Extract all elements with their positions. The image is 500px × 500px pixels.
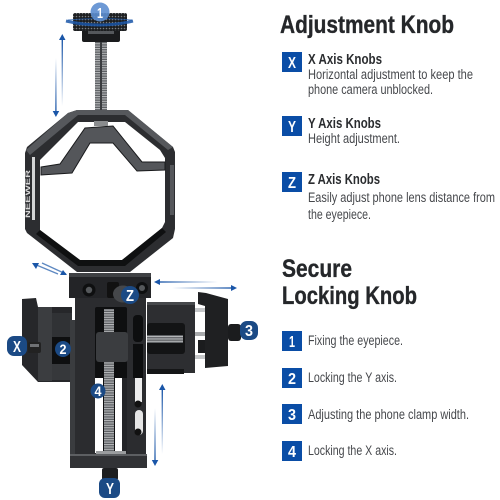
item: Z axis knobs: the eyepiece. xyxy=(308,207,371,222)
item: X axis knobs: phone camera unblocked. xyxy=(308,82,433,97)
item: 2 locking the Y axis xyxy=(282,368,397,388)
badge: 2: 2 xyxy=(60,341,67,357)
item: 2 locking the Y axis: Locking the Y axis. xyxy=(308,370,397,385)
item: 4 locking the X axis: 4 xyxy=(288,444,296,461)
badge: X: X xyxy=(13,339,21,356)
screws on top block xyxy=(82,282,148,302)
item: 1 fixing the eyepiece xyxy=(282,331,403,351)
arrow: vertical ring travel xyxy=(53,34,66,117)
item: 2 locking the Y axis: 2 xyxy=(288,371,296,388)
left clamp xyxy=(22,298,72,382)
badge: 1: 1 xyxy=(97,5,103,22)
badge: 3: 3 xyxy=(245,323,253,340)
bottom foot and Y knob xyxy=(70,451,147,480)
badge: 2 xyxy=(55,341,71,357)
item: 4 locking the X axis xyxy=(282,441,397,461)
heading: Secure Locking Knob: Secure xyxy=(282,255,352,283)
item: Y axis knobs: Height adjustment. xyxy=(308,131,400,146)
heading: Secure Locking Knob: Locking Knob xyxy=(282,282,417,310)
item: Z axis knobs: Z Axis Knobs xyxy=(308,171,380,188)
item: X axis knobs: X xyxy=(288,55,296,72)
item: Z axis knobs xyxy=(282,171,495,222)
badge: 4 xyxy=(90,383,106,399)
item: 3 adjusting the phone clamp width: 3 xyxy=(288,407,296,424)
item: X axis knobs: X Axis Knobs xyxy=(308,51,382,68)
heading: Secure Locking Knob xyxy=(282,255,417,310)
arrow: top knob rotation xyxy=(66,18,133,25)
item: Y axis knobs xyxy=(282,115,400,146)
item: 1 fixing the eyepiece: Fixing the eyepiece. xyxy=(308,333,403,348)
ring logo text: NEEWER xyxy=(26,169,32,218)
top knob with threaded rod xyxy=(73,13,127,111)
right clamp rods, jaw and knob xyxy=(195,292,241,368)
badge: Z: Z xyxy=(126,288,134,305)
badge: X xyxy=(7,336,27,356)
right clamp body xyxy=(147,302,195,374)
arrow: horizontal clamp travel xyxy=(154,279,237,291)
badge: Y xyxy=(99,478,120,498)
inner eyepiece bracket xyxy=(41,121,165,175)
heading: Adjustment Knob: Adjustment Knob xyxy=(280,11,454,39)
item: 3 adjusting the phone clamp width xyxy=(282,404,469,424)
item: Y axis knobs: Y Axis Knobs xyxy=(308,115,381,132)
badge: 4: 4 xyxy=(94,383,102,399)
vertical slide plate xyxy=(69,273,151,457)
item: X axis knobs xyxy=(282,51,473,97)
badge: Z xyxy=(121,286,139,305)
item: Z axis knobs: Z xyxy=(288,175,296,192)
item: 1 fixing the eyepiece: 1 xyxy=(289,334,295,351)
product: phone adapter mount xyxy=(22,13,241,480)
badge: 1 xyxy=(90,2,110,22)
item: 4 locking the X axis: Locking the X axis. xyxy=(308,443,397,458)
octagonal ring frame xyxy=(25,110,175,272)
item: Y axis knobs: Y xyxy=(288,119,296,136)
badge: Y: Y xyxy=(106,481,114,498)
arrow: vertical phone travel xyxy=(152,384,166,466)
arrow: diagonal z travel xyxy=(32,263,67,275)
badge: 3 xyxy=(240,321,258,340)
